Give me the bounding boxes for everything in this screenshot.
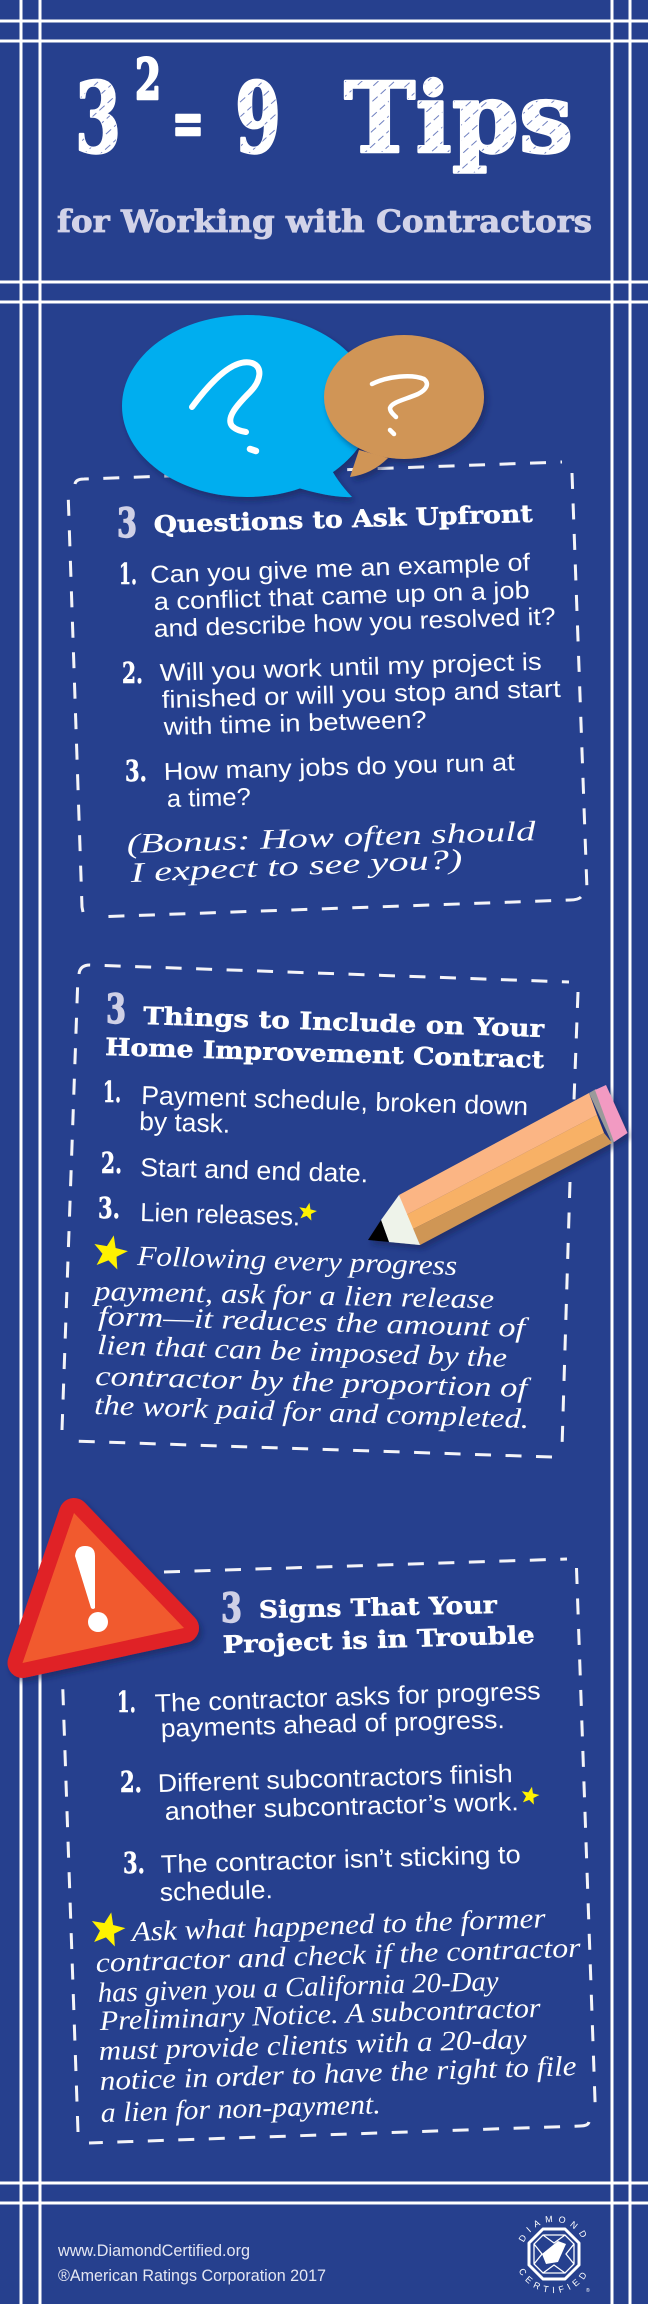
bonus note: (Bonus: How often should xyxy=(126,816,537,860)
heading: trouble xyxy=(221,1585,535,1659)
footer text: www.DiamondCertified.org xyxy=(57,2241,250,2260)
title: Tips xyxy=(344,61,573,175)
preliminary notice note: has given you a California 20-Day xyxy=(97,1966,500,2009)
question 1: Can you give me an example of xyxy=(150,549,531,589)
heading: questions: Questions to Ask Upfront xyxy=(153,499,533,539)
sign 3: 3. xyxy=(123,1846,145,1880)
contract item 1: by task. xyxy=(139,1106,231,1139)
icon: tan speech bubble xyxy=(324,335,484,477)
heading: questions: 3 xyxy=(117,500,137,547)
question 2: finished or will you stop and start xyxy=(161,676,561,714)
heading: trouble: Signs That Your xyxy=(259,1590,497,1624)
contract item 1: Payment schedule, broken down xyxy=(141,1080,529,1121)
sign 3: schedule. xyxy=(159,1876,273,1907)
question 1: and describe how you resolved it? xyxy=(153,603,556,643)
icon: small star xyxy=(297,1201,318,1221)
lien release note: lien that can be imposed by the xyxy=(97,1330,508,1374)
dashed border: contract xyxy=(62,965,578,1457)
preliminary notice note: notice in order to have the right to file xyxy=(99,2051,577,2097)
contract item 1: 1. xyxy=(103,1075,121,1109)
dashed border: questions xyxy=(68,462,587,917)
title: 3 xyxy=(75,61,121,175)
heading: contract: Things to Include on Your xyxy=(143,1001,545,1043)
heading: questions xyxy=(117,499,533,547)
lien release note: form—it reduces the amount of xyxy=(98,1301,529,1344)
lien release note: contractor by the proportion of xyxy=(95,1361,531,1404)
question 3 xyxy=(125,749,515,813)
question 1: 1. xyxy=(119,557,137,591)
panel: 3 signs your project is in trouble xyxy=(62,1559,596,2143)
title: 9 xyxy=(235,61,281,175)
panel: 3 questions to ask upfront xyxy=(68,462,587,917)
icon: warning triangle xyxy=(22,1513,184,1663)
contract item 3: 3. xyxy=(98,1191,120,1225)
preliminary notice note: Preliminary Notice. A subcontractor xyxy=(98,1993,541,2037)
sign 1: The contractor asks for progress xyxy=(154,1677,541,1718)
preliminary notice note: contractor and check if the contractor xyxy=(95,1933,581,1979)
question 2: with time in between? xyxy=(162,707,427,741)
preliminary notice note: a lien for non-payment. xyxy=(100,2089,381,2129)
contract item 2: Start and end date. xyxy=(140,1152,369,1188)
contract item 3: Lien releases. xyxy=(140,1197,301,1231)
sign 2: another subcontractor’s work. xyxy=(164,1788,519,1826)
question 3: a time? xyxy=(166,784,251,813)
question 2: 2. xyxy=(122,656,143,690)
panel: 3 things to include on your contract xyxy=(62,965,578,1457)
logo: Diamond Certified: DIAMOND xyxy=(518,2216,586,2242)
sign 2: 2. xyxy=(120,1765,142,1799)
heading: contract xyxy=(105,986,545,1074)
lien release note: payment, ask for a lien release xyxy=(92,1276,494,1315)
title: = xyxy=(172,89,204,159)
heading: contract: Home Improvement Contract xyxy=(105,1032,544,1074)
heading: trouble: Project is in Trouble xyxy=(222,1620,535,1659)
question 3: How many jobs do you run at xyxy=(163,749,515,786)
question 3: 3. xyxy=(125,754,147,788)
icon: large star xyxy=(88,1909,128,1948)
title xyxy=(75,47,573,175)
contract item 1 xyxy=(103,1075,529,1139)
sign 2: Different subcontractors finish xyxy=(157,1760,513,1798)
lien release note: Following every progress xyxy=(136,1241,458,1282)
title: 2 xyxy=(135,47,161,113)
footer text xyxy=(57,2241,326,2285)
question 1: a conflict that came up on a job xyxy=(153,577,530,616)
sign 2 xyxy=(120,1760,519,1826)
question 1 xyxy=(119,549,556,643)
subtitle: for Working with Contractors xyxy=(57,204,592,240)
question 2: Will you work until my project is xyxy=(159,649,542,687)
preliminary notice note: must provide clients with a 20-day xyxy=(98,2024,528,2067)
heading: trouble: 3 xyxy=(221,1585,242,1632)
preliminary notice note: Ask what happened to the former xyxy=(129,1903,546,1948)
sign 3: The contractor isn’t sticking to xyxy=(160,1841,521,1879)
bonus note xyxy=(126,816,537,889)
icon: large star xyxy=(90,1232,130,1271)
sign 1: payments ahead of progress. xyxy=(160,1706,505,1743)
bonus note: I expect to see you?) xyxy=(129,844,463,889)
icon: blue speech bubble xyxy=(122,315,372,497)
sign 1: 1. xyxy=(117,1685,136,1719)
icon: small star xyxy=(520,1785,541,1805)
lien release note xyxy=(92,1241,531,1435)
logo: Diamond Certified: CERTIFIED xyxy=(520,2268,586,2294)
question 2 xyxy=(122,649,561,741)
footer text: ®American Ratings Corporation 2017 xyxy=(58,2266,326,2285)
contract item 3 xyxy=(98,1191,301,1231)
icon: pencil xyxy=(368,1085,628,1245)
preliminary notice note xyxy=(95,1903,581,2129)
dashed border: trouble xyxy=(62,1559,596,2143)
sign 3 xyxy=(123,1841,521,1907)
logo: Diamond Certified: ® xyxy=(586,2287,590,2294)
sign 1 xyxy=(117,1677,541,1743)
heading: contract: 3 xyxy=(106,986,126,1033)
logo: Diamond Certified xyxy=(518,2216,590,2294)
lien release note: the work paid for and completed. xyxy=(94,1390,530,1435)
contract item 2: 2. xyxy=(101,1146,122,1180)
